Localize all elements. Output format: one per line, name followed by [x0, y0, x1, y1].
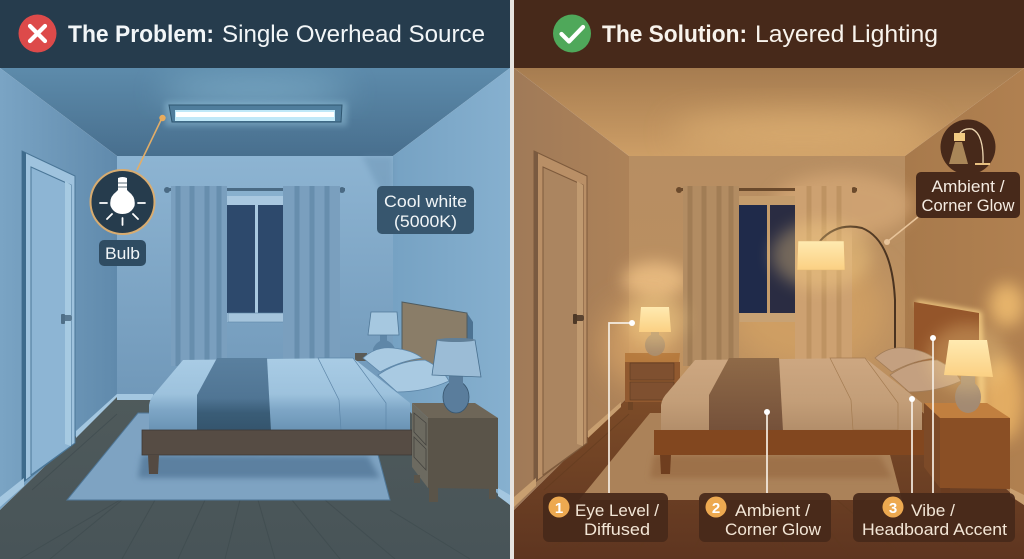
icon: red cross: [18, 14, 56, 52]
panel: the problem: [0, 0, 511, 559]
right wall warm: [905, 68, 1024, 505]
nightstand warm: [924, 403, 1010, 498]
bed leg: [148, 455, 159, 474]
label: bulb: [99, 240, 146, 266]
left wall: [0, 68, 117, 510]
divider: [510, 0, 514, 559]
ceiling glow: [672, 112, 932, 152]
door warm: [534, 151, 587, 483]
callout line: bulb: [137, 115, 166, 170]
icon: bulb: [90, 170, 154, 234]
ceiling light glow: [160, 80, 350, 104]
floor warm: [514, 396, 1024, 559]
label: cool white: Cool white: [384, 192, 467, 211]
heading: problem: The Problem:: [68, 21, 214, 48]
far lamp: [368, 312, 399, 352]
label 2: ambient: Ambient /: [735, 501, 810, 520]
headboard: [402, 302, 467, 372]
window: [225, 196, 285, 322]
right wall: [393, 68, 510, 505]
headboard shadow: [467, 313, 473, 372]
label 3: vibe: [853, 493, 1015, 542]
left nightstand: [625, 353, 680, 410]
mattress: [149, 358, 410, 430]
label: ambient corner glow top: [916, 172, 1020, 218]
far nightstand: [355, 353, 367, 361]
headboard glow: [916, 303, 982, 410]
label 2: ambient: 2: [712, 500, 720, 517]
heading: solution: The Solution:: [602, 21, 747, 48]
header bar: problem: [0, 0, 511, 68]
curtain rod warm: [676, 187, 857, 193]
table lamp: [432, 338, 481, 413]
floor lamp: [772, 221, 895, 368]
label: cool white: [377, 186, 474, 234]
label 2: ambient: Corner Glow: [725, 520, 822, 539]
wall glows: [602, 173, 1024, 442]
panel: the solution: [514, 0, 1024, 559]
pillows: [363, 348, 449, 392]
label: cool white: (5000K): [394, 212, 457, 231]
leader lines 3: [909, 335, 936, 493]
left curtain warm: [683, 186, 739, 366]
label 1: eye level: Eye Level /: [575, 501, 659, 520]
heading: solution: Layered Lighting: [755, 21, 938, 48]
icon: arc lamp: [940, 120, 996, 174]
curtain rod: [164, 187, 345, 193]
bed frame warm: [654, 430, 924, 455]
leader line 2: [764, 409, 770, 493]
rug: [67, 413, 390, 500]
ceiling warm: [514, 68, 1024, 156]
left table lamp: [625, 294, 685, 356]
back wall warm: [629, 156, 905, 400]
left curtain: [171, 186, 227, 366]
table lamp warm: [928, 324, 1008, 413]
label 1: eye level: Diffused: [584, 520, 650, 539]
left wall warm: [514, 68, 629, 510]
fluorescent ceiling light: [165, 102, 347, 126]
label: ambient corner glow top: Ambient /: [932, 178, 1005, 196]
label 3: vibe: Vibe /: [911, 501, 955, 520]
icon: green check: [553, 14, 591, 52]
bed runner: [197, 358, 271, 431]
right curtain: [283, 186, 340, 366]
label: ambient corner glow top: Corner Glow: [922, 197, 1015, 215]
pillows warm: [875, 348, 961, 392]
mattress warm: [661, 358, 922, 430]
rug warm: [579, 413, 902, 500]
door: [22, 151, 75, 483]
label 1: eye level: 1: [555, 500, 563, 517]
label 3: vibe: 3: [889, 500, 897, 517]
window warm: [737, 196, 797, 322]
rug shadow: [138, 455, 380, 478]
label 2: ambient: [699, 493, 831, 542]
label: bulb: Bulb: [105, 244, 140, 263]
nightstand: [412, 403, 498, 502]
light wedge on wall: [362, 156, 393, 190]
ceiling: [0, 68, 510, 156]
floor boards warm: [532, 414, 982, 559]
header bar: solution: [514, 0, 1024, 68]
heading: problem: Single Overhead Source: [222, 21, 485, 48]
floor: [0, 396, 510, 559]
label 1: eye level: [543, 493, 668, 542]
baseboards: [0, 394, 510, 507]
bed frame: [142, 430, 412, 455]
floor boards: [20, 414, 470, 559]
label 3: vibe: Headboard Accent: [862, 520, 1007, 539]
headboard warm: [914, 302, 979, 372]
back wall: [117, 156, 393, 400]
baseboards warm: [514, 402, 1024, 507]
right curtain warm: [795, 186, 852, 366]
leader line 1: [609, 320, 635, 493]
callout line: ambient: [884, 217, 918, 245]
bed runner warm: [709, 358, 783, 431]
bed leg warm: [660, 455, 671, 474]
